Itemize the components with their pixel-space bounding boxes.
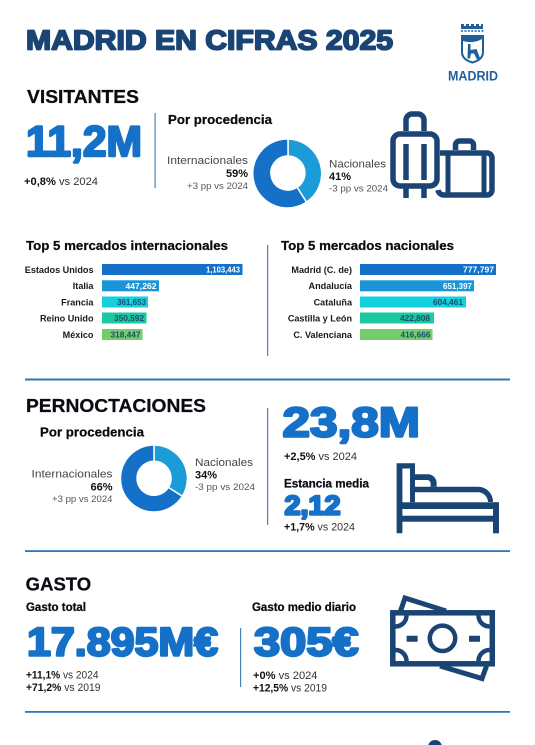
heading: pernoctaciones: PERNOCTACIONES	[26, 396, 206, 416]
icon: bed	[397, 463, 499, 533]
bar chart: top 5 international markets	[25, 264, 242, 340]
bar chart: top 5 international markets: 350,592	[114, 314, 145, 323]
daily spend variation: +12,5% vs 2019	[253, 682, 327, 694]
bar chart: top 5 international markets: 318,447	[110, 330, 141, 340]
bar chart: top 5 national markets: 422,808	[400, 314, 431, 323]
logo: Madrid coat of arms	[448, 24, 498, 84]
bar chart: top 5 national markets: Cataluña	[314, 297, 353, 307]
label: internacionales 59%	[167, 155, 249, 192]
bar chart: top 5 national markets: Andalucía	[309, 281, 353, 291]
title: MADRID EN CIFRAS 2025	[26, 24, 393, 56]
bar chart: top 5 international markets: 1,103,443	[206, 266, 241, 274]
donut chart: visitors by origin	[253, 139, 322, 208]
heading: gasto: GASTO	[26, 574, 91, 594]
bar chart: top 5 national markets: Madrid (C. de)	[291, 265, 352, 275]
average stay variation: +1,7% vs 2024	[284, 522, 355, 534]
label: internacionales 66%: +3 pp vs 2024	[52, 494, 112, 505]
total spend variation: +71,2% vs 2019	[26, 682, 100, 694]
heading: top 5 nacionales: Top 5 mercados nacionales	[281, 238, 454, 253]
subheading: por procedencia: Por procedencia	[40, 424, 145, 440]
label: nacionales 41%: 41%	[329, 171, 351, 183]
icon: banknotes	[393, 598, 492, 678]
bar chart: top 5 international markets: Francia	[61, 297, 94, 307]
bar chart: top 5 national markets: C. Valenciana	[293, 330, 353, 340]
label: nacionales 34%: Nacionales	[195, 457, 254, 469]
overnight stays variation: +2,5% vs 2024	[284, 451, 357, 463]
daily spend variation: +0% vs 2024	[253, 670, 318, 682]
label: nacionales 34%: -3 pp vs 2024	[195, 482, 255, 493]
label: internacionales 59%: +3 pp vs 2024	[187, 181, 248, 192]
label: internacionales 59%: 59%	[226, 168, 248, 180]
icon: luggage	[393, 114, 492, 198]
total spend variation: +11,1% vs 2024	[26, 670, 98, 682]
bar chart: top 5 national markets: 416,666	[400, 330, 431, 340]
subheading: por procedencia: Por procedencia	[168, 112, 273, 127]
label: nacionales 34%	[195, 457, 255, 493]
big number: average daily spend: 305€	[254, 620, 358, 664]
daily spend variation	[253, 670, 327, 694]
big number: overnight stays: 23,8M	[282, 398, 420, 446]
label: internacionales 66%	[32, 468, 113, 505]
label: nacionales 41%: Nacionales	[329, 158, 387, 170]
bar chart: top 5 national markets: 777,797	[463, 266, 495, 274]
bar chart: top 5 national markets: Castilla y León	[288, 313, 352, 323]
visitors variation: +0,8% vs 2024	[24, 176, 98, 188]
label: nacionales 41%	[329, 158, 388, 194]
big number: visitors: 11,2M	[26, 118, 142, 166]
bar chart: top 5 international markets: 447,262	[126, 282, 157, 291]
big number: total spend: 17.895M€	[27, 620, 218, 664]
bar chart: top 5 international markets: 361,653	[117, 298, 147, 307]
big number: average stay: 2,12	[284, 490, 340, 520]
icon: partial figure at page edge	[428, 740, 442, 745]
heading: visitantes: VISITANTES	[27, 87, 139, 107]
subheading: gasto total: Gasto total	[26, 602, 86, 614]
bar chart: top 5 national markets: 651,397	[443, 282, 473, 291]
bar chart: top 5 national markets: 604,461	[433, 298, 464, 307]
label: nacionales 34%: 34%	[195, 470, 217, 482]
label: internacionales 66%: 66%	[90, 482, 113, 494]
heading: top 5 internacionales: Top 5 mercados internacionales	[26, 238, 228, 253]
bar chart: top 5 international markets: Reino Unido	[40, 313, 94, 323]
label: internacionales 59%: Internacionales	[167, 155, 249, 167]
logo: Madrid coat of arms: MADRID	[448, 68, 498, 84]
label: nacionales 41%: -3 pp vs 2024	[329, 184, 388, 194]
subheading: estancia media: Estancia media	[284, 478, 370, 490]
label: internacionales 66%: Internacionales	[32, 468, 113, 480]
total spend variation	[26, 670, 100, 694]
donut chart: overnight stays by origin	[120, 445, 187, 512]
subheading: gasto medio diario: Gasto medio diario	[252, 602, 356, 614]
bar chart: top 5 international markets: Italia	[73, 281, 94, 291]
bar chart: top 5 national markets	[288, 264, 496, 340]
bar chart: top 5 international markets: Estados Unidos	[25, 265, 94, 275]
bar chart: top 5 international markets: México	[63, 330, 94, 340]
